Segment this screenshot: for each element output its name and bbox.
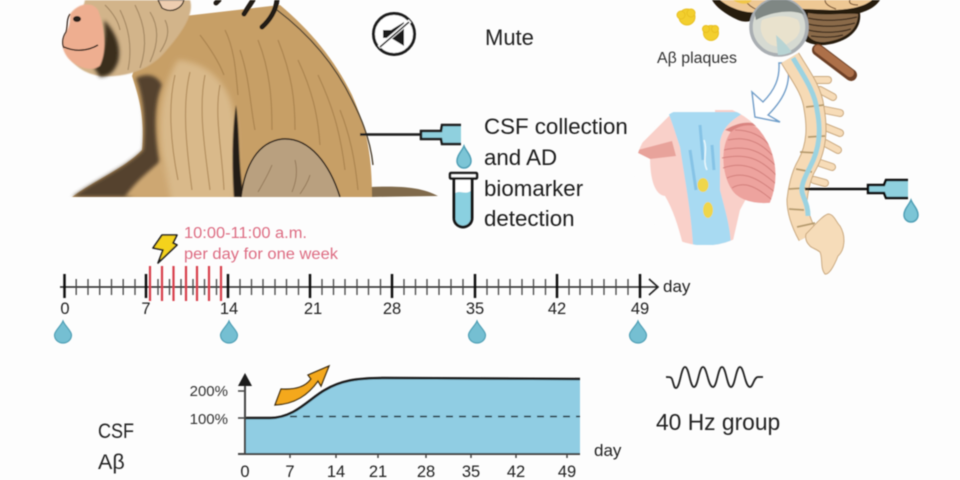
axes (238, 384, 580, 455)
chart y labels: 200% (190, 383, 228, 400)
chart y labels (190, 383, 228, 428)
label: Mute: Mute (485, 25, 534, 50)
monkey tail (370, 187, 438, 197)
monkey thigh (241, 139, 340, 197)
chart y labels: 100% (190, 411, 228, 428)
axis line and arrow (60, 279, 658, 295)
monkey fur strokes (171, 30, 358, 190)
electrodes on neck (216, 0, 277, 27)
timeline day labels: 14 (220, 300, 238, 318)
icon: mute symbol (374, 14, 414, 54)
text: CSF collection and AD biomarker detection: and AD (484, 145, 557, 170)
monkey head fur strokes (105, 5, 168, 70)
spine column outline (790, 58, 816, 236)
icon: spine CSF drop (904, 200, 918, 222)
monkey head fur (66, 0, 191, 76)
label: Abeta plaques: Aβ plaques (657, 50, 737, 67)
monkey cheek shadow (94, 20, 119, 77)
sacrum (806, 214, 844, 274)
timeline day labels (60, 300, 649, 318)
syringe into spine (805, 188, 867, 190)
chart curve (245, 378, 580, 418)
timeline: day axis (60, 266, 658, 301)
chart x labels (240, 463, 576, 480)
label: 40 Hz group: 40 Hz group (656, 409, 780, 435)
monkey lower arm fur (124, 160, 169, 198)
text: stimulation schedule: 10:00-11:00 a.m. (184, 225, 307, 242)
brain gyri (720, 0, 872, 12)
sampling drops on timeline (54, 321, 646, 343)
illustration: spine (789, 58, 908, 274)
monkey ear (158, 0, 184, 10)
vertebrae processes fill (814, 80, 840, 183)
major week ticks (64, 274, 640, 298)
timeline day labels: 35 (466, 300, 484, 318)
icon: amyloid plaques (677, 9, 718, 40)
chart area (245, 378, 580, 454)
icon: lightning bolt (153, 235, 177, 263)
icon: 40 Hz waveform (666, 367, 763, 388)
icon: CSF drop (457, 146, 471, 168)
monkey arm highlight (160, 60, 237, 205)
illustration: brain with magnifier (712, 0, 880, 75)
timeline day labels: 49 (631, 300, 649, 318)
monkey chest shadow (72, 75, 162, 197)
illustration: macaque monkey (63, 0, 438, 205)
cerebellum lobe (723, 125, 777, 203)
vertebra discs (789, 105, 825, 227)
monkey body (72, 5, 372, 197)
text: CSF collection and AD biomarker detection (484, 114, 628, 231)
timeline day labels: 21 (304, 300, 322, 318)
pink tissue (634, 104, 778, 248)
text: stimulation schedule (184, 225, 338, 263)
baseline dashed 100% (290, 416, 580, 418)
timeline day labels: 28 (383, 300, 401, 318)
magnifier lens (751, 0, 807, 55)
text: CSF collection and AD biomarker detection: biomarker (484, 176, 584, 201)
cerebrospinal fluid channel (668, 112, 745, 245)
arrow: orange increase (275, 366, 329, 405)
label: chart unit: day (594, 441, 622, 460)
vertebrae processes outline (814, 80, 840, 183)
timeline day labels: 42 (548, 300, 566, 318)
label: CSF Abeta (98, 419, 134, 474)
illustration: spinal cross-section (634, 104, 778, 248)
timeline day labels: 7 (141, 300, 151, 318)
spine column (790, 58, 816, 236)
text: CSF collection and AD biomarker detection: CSF collection (484, 114, 628, 139)
plaques in fluid (698, 178, 708, 192)
timeline day labels: 0 (60, 300, 70, 318)
label: CSF Abeta: Aβ (98, 450, 125, 474)
text: stimulation schedule: per day for one week (184, 246, 338, 263)
arrow: pointer to cross-section (752, 63, 789, 122)
spinal cord (793, 58, 819, 216)
minor day ticks (76, 279, 628, 295)
label: timeline unit: day (663, 277, 691, 296)
magnifier handle (818, 50, 851, 75)
label: CSF Abeta: CSF (98, 419, 134, 443)
monkey back outline (277, 10, 373, 165)
cerebellum (806, 13, 858, 42)
text: CSF collection and AD biomarker detection: detection (484, 206, 574, 231)
chart: CSF Abeta 40 Hz area chart (238, 373, 580, 458)
brain outline (712, 0, 880, 45)
icon: syringe collecting from monkey (360, 125, 461, 144)
icon: test tube (450, 173, 477, 227)
stimulation ticks in red (150, 266, 221, 301)
monkey face (63, 4, 104, 69)
